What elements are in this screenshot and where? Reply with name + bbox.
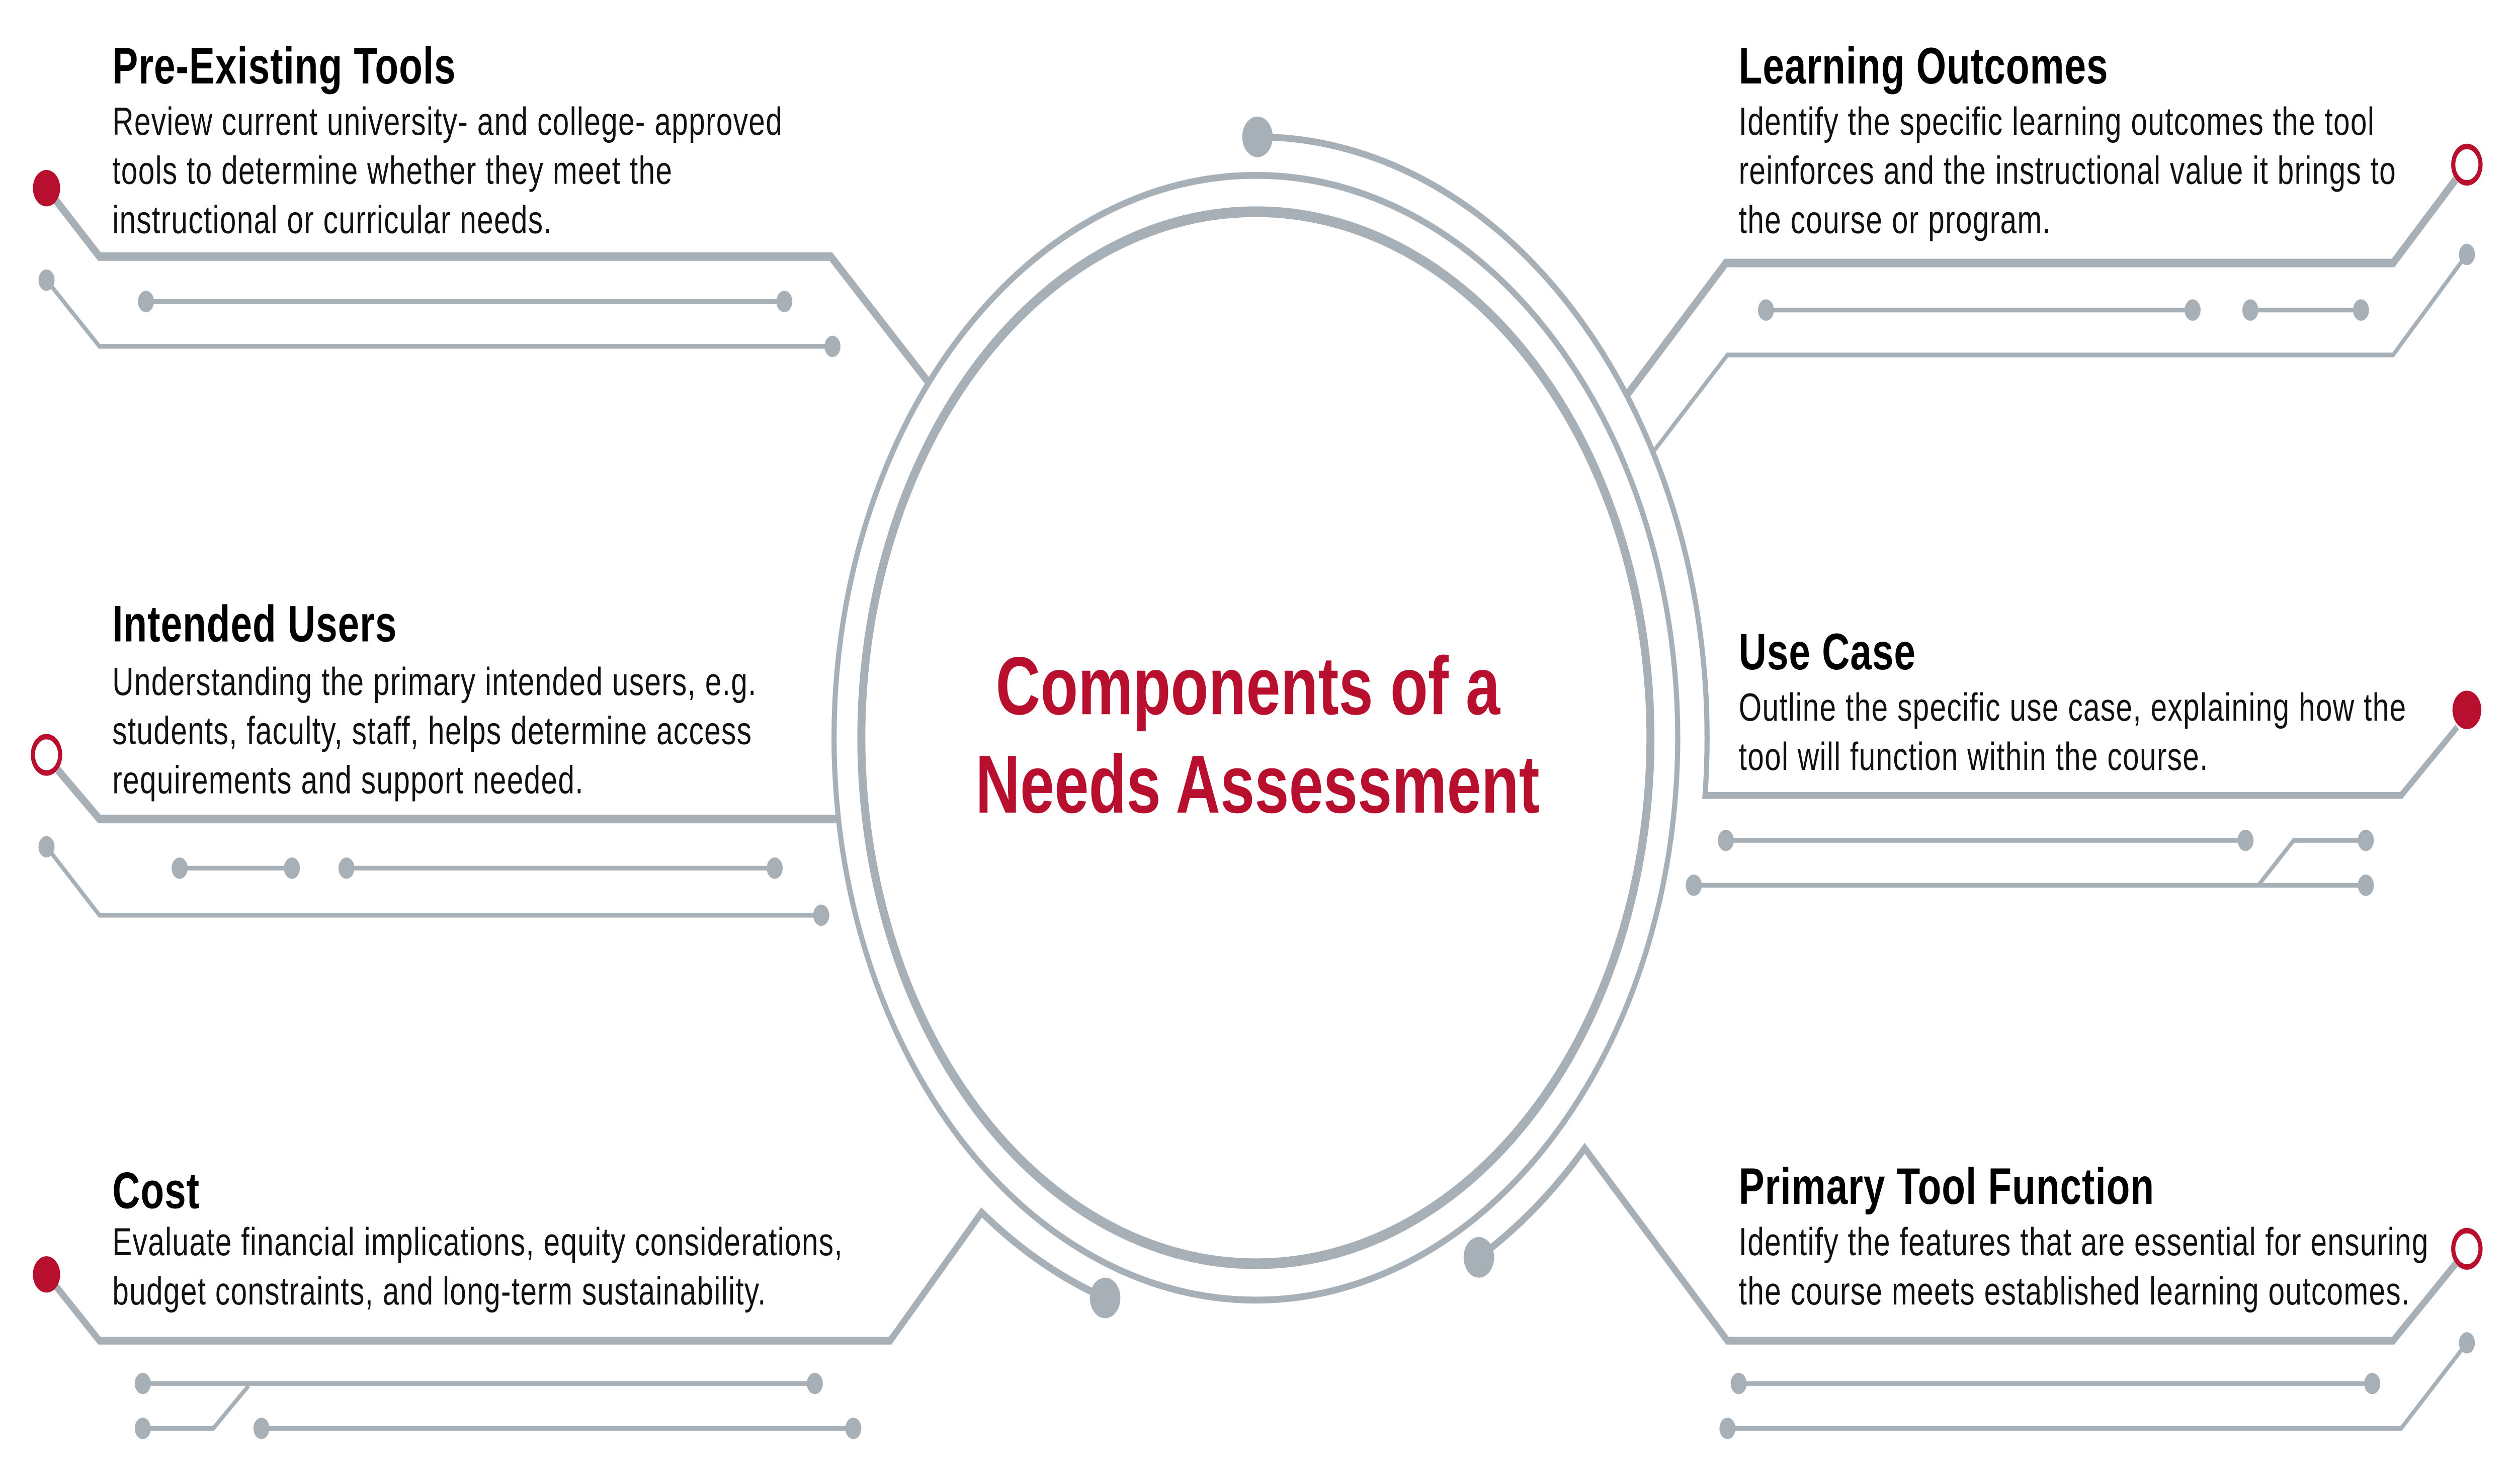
panel: pre-existing tools text: instructional or curricular needs. — [112, 197, 552, 241]
panel: primary tool function text: Identify the features that are essential for ensuring — [1739, 1219, 2429, 1264]
panel: learning outcomes text: the course or program. — [1739, 197, 2051, 241]
panel: learning outcomes text: Learning Outcomes — [1739, 37, 2108, 95]
panel: use case circuit — [1242, 117, 2481, 896]
central rings — [834, 176, 1678, 1300]
panel: learning outcomes text: Identify the specific learning outcomes the tool — [1739, 99, 2375, 143]
title: Components of a — [996, 640, 1500, 732]
panel: intended users text: students, faculty, staff, helps determine access — [112, 708, 752, 753]
panel: cost text: Cost — [112, 1162, 200, 1219]
panel: cost text: budget constraints, and long-term sustainability. — [112, 1269, 767, 1313]
panel: pre-existing tools text: tools to determine whether they meet the — [112, 148, 673, 193]
panel: primary tool function text: Primary Tool Function — [1739, 1158, 2154, 1215]
panel: pre-existing tools text: Pre-Existing Tools — [112, 37, 456, 95]
panel: cost text — [112, 1162, 843, 1313]
panel: intended users text: Intended Users — [112, 595, 397, 653]
panel: pre-existing tools circuit — [33, 170, 927, 381]
panel: use case text: Use Case — [1739, 623, 1916, 681]
title — [975, 640, 1540, 830]
panel: learning outcomes text — [1739, 37, 2396, 241]
panel: cost text: Evaluate financial implications, equity considerations, — [112, 1219, 843, 1264]
panel: learning outcomes circuit — [1626, 146, 2480, 453]
panel: use case text: tool will function within the course. — [1739, 734, 2209, 778]
panel: intended users circuit — [33, 737, 837, 926]
panel: primary tool function circuit — [1464, 1148, 2480, 1439]
panel: use case text — [1739, 623, 2406, 778]
panel: learning outcomes text: reinforces and the instructional value it brings to — [1739, 148, 2396, 193]
panel: primary tool function text — [1739, 1158, 2429, 1313]
panel: intended users text: Understanding the primary intended users, e.g. — [112, 659, 757, 704]
panel: use case text: Outline the specific use case, explaining how the — [1739, 685, 2406, 729]
panel: pre-existing tools text — [112, 37, 783, 241]
panel: intended users text: requirements and support needed. — [112, 757, 584, 802]
panel: intended users text — [112, 595, 757, 802]
panel: pre-existing tools text: Review current university- and college- approved — [112, 99, 783, 143]
title: Needs Assessment — [975, 738, 1540, 830]
panel: cost circuit — [33, 1212, 1120, 1439]
panel: primary tool function text: the course meets established learning outcomes. — [1739, 1269, 2410, 1313]
